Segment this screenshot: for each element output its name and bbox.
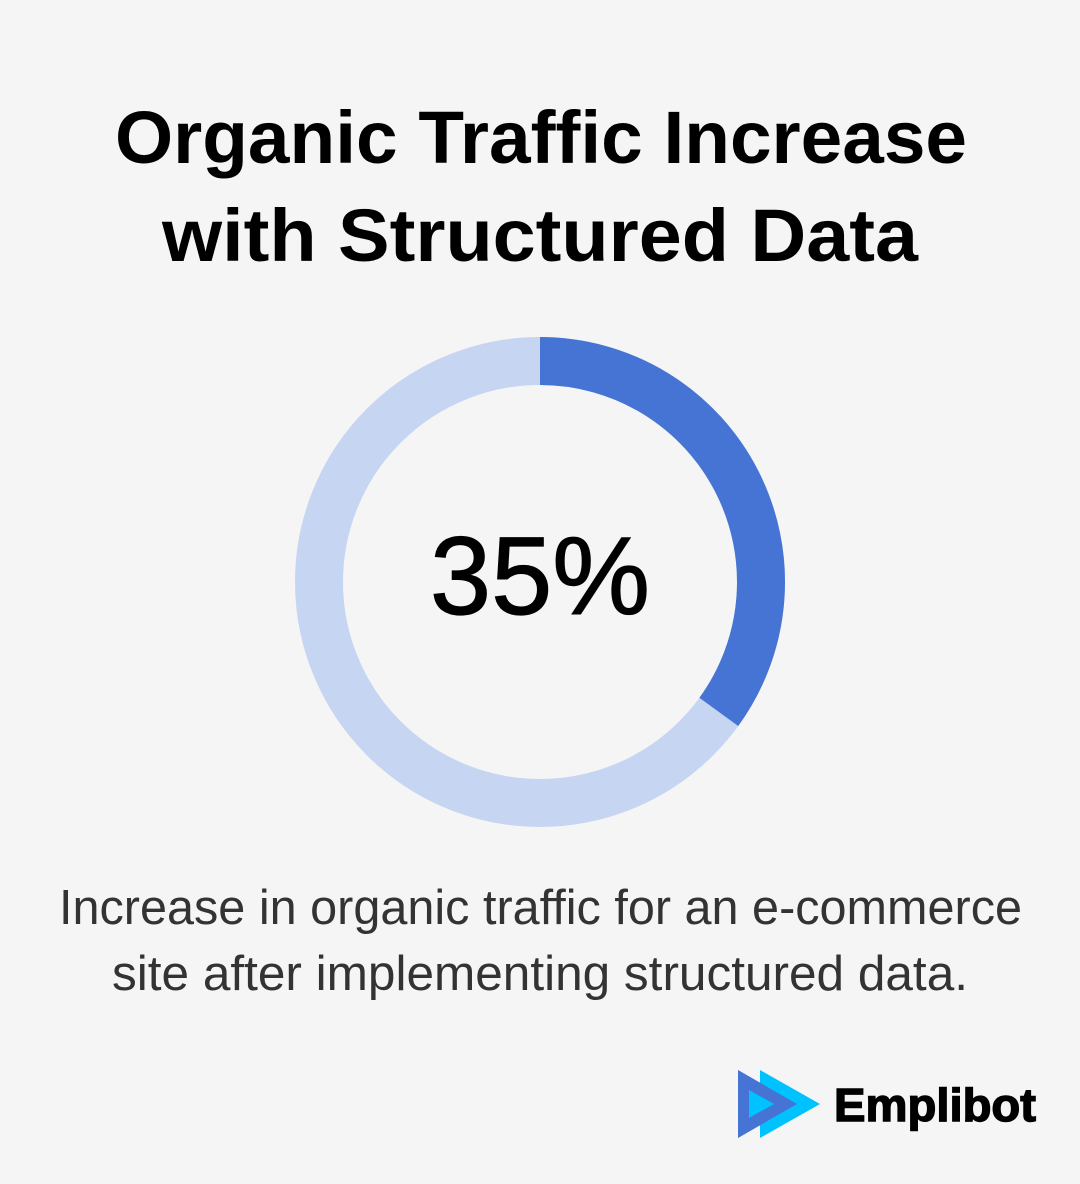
logo wordmark: Emplibot (834, 1079, 1036, 1131)
description: site after implementing structured data. (112, 947, 968, 1001)
description: Increase in organic traffic for an e-commerce (59, 881, 1022, 935)
donut chart: 35% (319, 361, 761, 803)
description (59, 881, 1022, 1001)
center value: 35% (430, 515, 650, 638)
title: Organic Traffic Increase (115, 96, 967, 179)
title: with Structured Data (161, 194, 919, 277)
logo: Emplibot (738, 1070, 1036, 1138)
title (115, 96, 967, 277)
icon: play triangles (738, 1070, 820, 1138)
